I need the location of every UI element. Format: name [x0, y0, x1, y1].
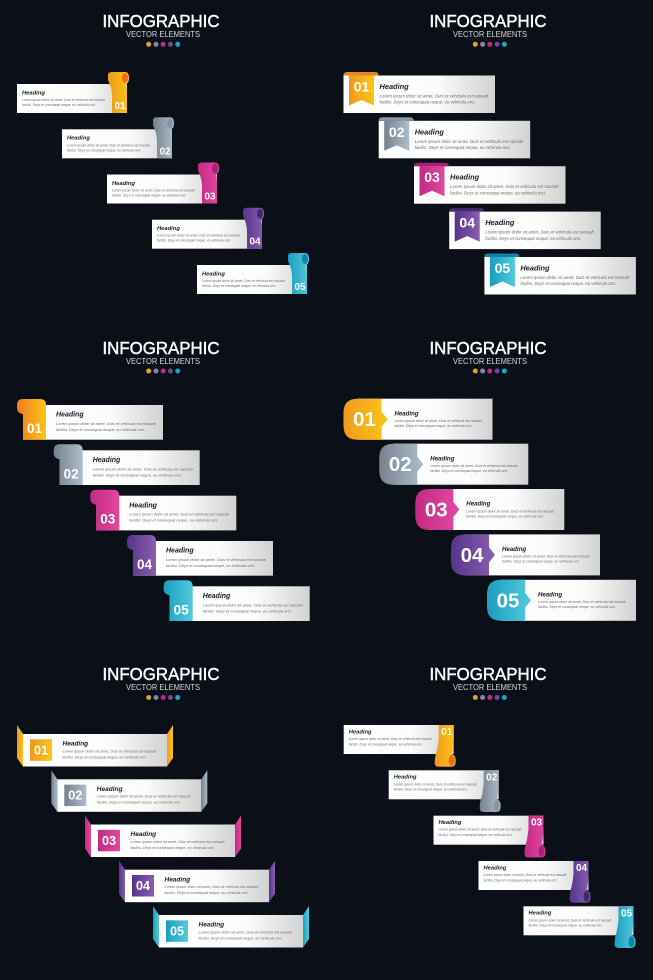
- item 02: [379, 117, 530, 158]
- title: INFOGRAPHIC: [430, 11, 546, 31]
- item 04: 04: [576, 863, 587, 874]
- item 02: Heading: [97, 786, 122, 793]
- item 02: 02: [159, 146, 171, 157]
- item 04: Heading: [166, 548, 194, 555]
- item 04: Heading: [164, 876, 190, 883]
- item 01: facilisi. Deys et consequat neque, eu vehicula orci.: [56, 427, 145, 432]
- item 04: Lorem ipsum dolor sit amet, Duis et vehicula est nassah: [484, 873, 567, 877]
- title: INFOGRAPHIC: [102, 11, 220, 31]
- item 02: Heading: [415, 127, 444, 136]
- item 05: Lorem ipsum dolor sit amet, Duis et vehicula est nassah: [198, 930, 292, 934]
- item 03: facilisi. Deys et consequat neque, eu vehicula orci.: [466, 514, 544, 518]
- subtitle: VECTOR ELEMENTS: [453, 683, 527, 692]
- item 02: [51, 770, 207, 812]
- item 02: facilisi. Deys et consequat neque, eu vehicula orci.: [67, 148, 141, 152]
- item 03: Heading: [438, 820, 462, 826]
- item 02: 02: [389, 124, 405, 140]
- colour dots: [146, 695, 180, 700]
- subtitle: VECTOR ELEMENTS: [126, 30, 200, 39]
- item 02: Lorem ipsum dolor sit amet, Duis et vehicula est nassah: [67, 143, 150, 147]
- panel: bookmarks top right: [344, 11, 636, 294]
- title: INFOGRAPHIC: [430, 338, 546, 358]
- item 03: 03: [100, 512, 116, 527]
- item 05: Lorem ipsum dolor sit amet, Duis et vehicula est nassah: [528, 918, 612, 922]
- item 01: facilisi. Deys et consequat neque, eu vehicula orci.: [62, 755, 146, 759]
- item 04: Heading: [157, 226, 180, 232]
- item 02: [379, 444, 528, 485]
- item 05: facilisi. Deys et consequat neque, eu vehicula orci.: [198, 936, 282, 940]
- item 01: Heading: [56, 412, 84, 419]
- item 04: 04: [249, 237, 261, 248]
- item 02: Lorem ipsum dolor sit amet, Duis et vehicula est nassah: [97, 795, 191, 799]
- item 02: [54, 444, 200, 485]
- item 01: [17, 72, 129, 113]
- item 03: Lorem ipsum dolor sit amet, Duis et vehicula est nassah: [130, 840, 224, 844]
- colour dots: [473, 368, 507, 374]
- item 03: Lorem ipsum dolor sit amet, Duis et vehicula est nassah: [450, 184, 559, 189]
- subtitle: VECTOR ELEMENTS: [126, 683, 200, 692]
- item 02: [62, 117, 174, 158]
- item 05: [164, 580, 310, 621]
- item 04: Lorem ipsum dolor sit amet, Duis et vehicula est nassah: [485, 230, 595, 235]
- item 03: Lorem ipsum dolor sit amet, Duis et vehicula est nassah: [129, 512, 230, 517]
- item 04: Lorem ipsum dolor sit amet, Duis et vehicula est nassah: [157, 234, 240, 238]
- item 05: facilisi. Deys et consequat neque, eu vehicula orci.: [203, 608, 292, 613]
- item 02: facilisi. Deys et consequat neque, eu vehicula orci.: [394, 788, 468, 792]
- item 03: Heading: [129, 502, 158, 509]
- item 04: 04: [136, 879, 150, 893]
- item 01: 01: [34, 743, 48, 757]
- item 02: Lorem ipsum dolor sit amet, Duis et vehicula est nassah: [394, 782, 477, 786]
- item 03: Heading: [450, 173, 480, 182]
- item 05: Heading: [528, 911, 552, 917]
- item 01: Heading: [349, 729, 372, 735]
- item 05: facilisi. Deys et consequat neque, eu vehicula orci.: [520, 281, 616, 286]
- item 05: 05: [294, 282, 306, 293]
- item 05: Lorem ipsum dolor sit amet, Duis et vehicula est nassah: [538, 600, 626, 604]
- item 03: [85, 816, 241, 857]
- item 05: 05: [497, 589, 519, 612]
- item 01: [17, 725, 173, 766]
- item 02: Heading: [430, 455, 455, 462]
- item 03: 03: [102, 834, 116, 848]
- item 01: facilisi. Deys et consequat neque, eu vehicula orci.: [394, 424, 472, 428]
- item 03: Heading: [466, 501, 491, 508]
- item 03: Heading: [112, 181, 135, 187]
- item 02: facilisi. Deys et consequat neque, eu vehicula orci.: [97, 801, 181, 805]
- item 03: [434, 816, 546, 857]
- title: INFOGRAPHIC: [102, 664, 220, 684]
- item 05: Lorem ipsum dolor sit amet, Duis et vehicula est nassah: [202, 279, 285, 283]
- item 04: [152, 208, 264, 249]
- subtitle: VECTOR ELEMENTS: [453, 357, 527, 366]
- colour dots: [146, 368, 180, 374]
- item 01: 01: [441, 727, 453, 738]
- item 05: 05: [621, 908, 632, 919]
- item 02: 02: [389, 453, 412, 476]
- item 01: Heading: [22, 90, 45, 96]
- item 04: Lorem ipsum dolor sit amet, Duis et vehicula est nassah: [166, 557, 267, 562]
- item 01: Lorem ipsum dolor sit amet, Duis et vehicula est nassah: [349, 737, 432, 741]
- item 02: 02: [486, 772, 498, 783]
- item 03: facilisi. Deys et consequat neque, eu vehicula orci.: [130, 846, 214, 850]
- item 03: [415, 489, 564, 530]
- item 04: 04: [137, 557, 152, 572]
- item 01: [344, 399, 492, 440]
- item 03: facilisi. Deys et consequat neque, eu vehicula orci.: [438, 833, 513, 837]
- subtitle: VECTOR ELEMENTS: [126, 357, 200, 366]
- title: INFOGRAPHIC: [430, 664, 546, 684]
- item 04: [451, 534, 600, 575]
- item 02: Heading: [67, 136, 90, 142]
- item 04: facilisi. Deys et consequat neque, eu vehicula orci.: [164, 891, 248, 895]
- colour dots: [146, 42, 180, 47]
- item 04: Lorem ipsum dolor sit amet, Duis et vehicula est nassah: [164, 885, 258, 889]
- item 03: Lorem ipsum dolor sit amet, Duis et vehicula est nassah: [466, 509, 554, 513]
- item 01: Lorem ipsum dolor sit amet, Duis et vehicula est nassah: [56, 421, 157, 426]
- item 03: facilisi. Deys et consequat neque, eu vehicula orci.: [129, 518, 218, 523]
- item 02: Lorem ipsum dolor sit amet, Duis et vehicula est nassah: [415, 139, 524, 144]
- item 04: Heading: [485, 218, 515, 227]
- item 02: facilisi. Deys et consequat neque, eu vehicula orci.: [93, 472, 182, 477]
- item 02: Heading: [93, 457, 121, 464]
- item 03: facilisi. Deys et consequat neque, eu vehicula orci.: [112, 194, 186, 198]
- item 03: [90, 490, 236, 530]
- item 04: 04: [459, 215, 475, 231]
- item 04: Lorem ipsum dolor sit amet, Duis et vehicula est nassah: [502, 555, 590, 559]
- item 01: Lorem ipsum dolor sit amet, Duis et vehicula est nassah: [380, 94, 489, 98]
- item 03: Heading: [130, 831, 156, 838]
- item 05: Heading: [538, 591, 562, 598]
- item 01: Lorem ipsum dolor sit amet, Duis et vehicula est nassah: [62, 749, 156, 753]
- item 01: 01: [27, 421, 42, 436]
- item 03: 03: [204, 192, 216, 202]
- item 04: [127, 535, 273, 576]
- item 01: Lorem ipsum dolor sit amet, Duis et vehicula est nassah: [394, 419, 482, 423]
- item 05: facilisi. Deys et consequat neque, eu vehicula orci.: [538, 605, 616, 609]
- item 05: 05: [174, 602, 189, 617]
- item 05: [197, 253, 309, 294]
- colour dots: [473, 42, 507, 47]
- item 05: Heading: [198, 922, 224, 929]
- item 01: facilisi. Deys et consequat neque, eu vehicula orci.: [22, 103, 96, 107]
- item 03: [414, 163, 566, 204]
- item 03: 03: [425, 498, 448, 522]
- item 01: Heading: [62, 741, 88, 748]
- item 05: Lorem ipsum dolor sit amet, Duis et vehicula est nassah: [520, 275, 630, 280]
- item 03: facilisi. Deys et consequat neque, eu vehicula orci.: [450, 190, 546, 195]
- item 05: Heading: [520, 264, 550, 272]
- item 03: Lorem ipsum dolor sit amet, Duis et vehicula est nassah: [438, 828, 522, 832]
- item 01: Heading: [380, 82, 409, 91]
- item 03: 03: [531, 818, 542, 829]
- item 04: [449, 208, 601, 249]
- item 04: facilisi. Deys et consequat neque, eu vehicula orci.: [157, 239, 231, 243]
- item 05: [153, 906, 309, 948]
- item 05: Heading: [202, 271, 225, 277]
- item 04: [119, 861, 275, 902]
- item 01: [344, 72, 495, 113]
- panel: rounded arrow tabs middle right: [344, 338, 636, 621]
- item 02: facilisi. Deys et consequat neque, eu vehicula orci.: [430, 469, 508, 473]
- item 05: facilisi. Deys et consequat neque, eu vehicula orci.: [528, 924, 603, 928]
- item 02: Lorem ipsum dolor sit amet, Duis et vehicula est nassah: [93, 466, 193, 471]
- item 01: 01: [353, 408, 376, 431]
- item 04: Heading: [484, 865, 507, 871]
- item 05: 05: [170, 924, 184, 938]
- item 04: facilisi. Deys et consequat neque, eu vehicula orci.: [502, 560, 580, 564]
- panel: hanging scrolls bottom right: [344, 664, 636, 948]
- colour dots: [473, 695, 507, 700]
- item 05: [524, 906, 636, 948]
- item 05: facilisi. Deys et consequat neque, eu vehicula orci.: [202, 284, 276, 288]
- panel: winged cards bottom left: [17, 664, 309, 948]
- item 02: 02: [64, 466, 79, 481]
- subtitle: VECTOR ELEMENTS: [453, 30, 527, 39]
- item 02: Heading: [394, 775, 417, 781]
- title: INFOGRAPHIC: [102, 338, 220, 358]
- item 04: facilisi. Deys et consequat neque, eu vehicula orci.: [166, 563, 255, 568]
- item 03: [107, 162, 219, 204]
- item 02: facilisi. Deys et consequat neque, eu vehicula orci.: [415, 145, 511, 150]
- item 03: 03: [424, 169, 440, 185]
- item 01: Heading: [394, 410, 419, 417]
- item 04: 04: [461, 544, 484, 567]
- item 02: 02: [68, 789, 82, 803]
- item 01: facilisi. Deys et consequat neque, eu vehicula orci.: [380, 100, 476, 105]
- item 04: Heading: [502, 546, 526, 553]
- item 05: [487, 580, 636, 621]
- item 01: Lorem ipsum dolor sit amet, Duis et vehicula est nassah: [22, 98, 105, 102]
- item 03: Lorem ipsum dolor sit amet, Duis et vehicula est nassah: [112, 188, 195, 192]
- item 04: [478, 861, 590, 903]
- item 04: facilisi. Deys et consequat neque, eu vehicula orci.: [485, 236, 581, 241]
- item 05: Lorem ipsum dolor sit amet, Duis et vehicula est nassah: [203, 602, 303, 607]
- item 01: [17, 399, 163, 440]
- item 04: facilisi. Deys et consequat neque, eu vehicula orci.: [484, 878, 558, 882]
- panel: scroll ribbons top left: [17, 11, 309, 294]
- item 01: 01: [114, 101, 126, 112]
- item 05: [484, 254, 636, 294]
- item 01: 01: [354, 78, 369, 94]
- panel: folded tabs middle left: [17, 338, 310, 621]
- item 02: [389, 770, 501, 812]
- item 05: Heading: [203, 593, 231, 600]
- item 02: Lorem ipsum dolor sit amet, Duis et vehicula est nassah: [430, 464, 518, 468]
- item 01: facilisi. Deys et consequat neque, eu vehicula orci.: [349, 742, 423, 746]
- item 01: [344, 725, 456, 767]
- item 05: 05: [495, 260, 510, 276]
